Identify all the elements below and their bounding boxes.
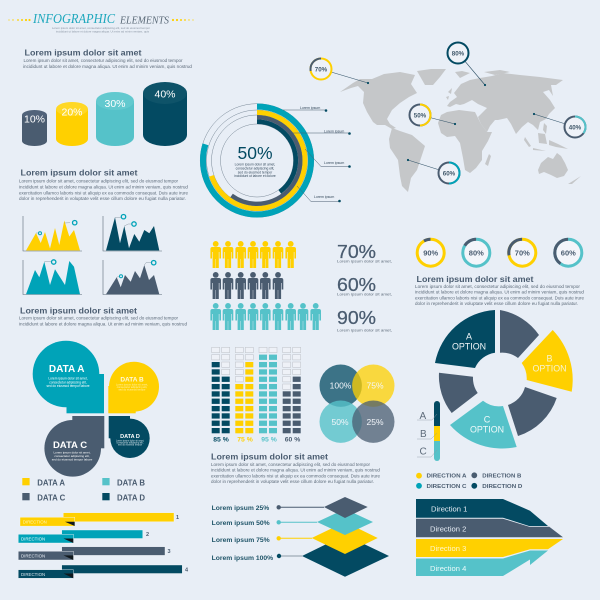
people percentages: Lorem ipsum dolor sit amet, [337,258,392,264]
map callouts [310,42,586,184]
petal: data b: consectetur adipiscing elit, [117,385,147,389]
text block: area charts heading: Lorem ipsum dolor sit amet, consectetur adipiscing elit, sed do eiusmod tempor [19,178,178,184]
arrow 3: Direction 3 [430,544,466,553]
bar chart labels [213,437,300,444]
bar 1: DIRECTION [23,520,47,524]
text block: donuts caption: incididunt ut labore et dolore magna aliqua. Ut enim ad minim veniam, quis nostrud [415,290,584,296]
callout 40%: 40% [569,124,582,131]
segment a: A [466,332,472,342]
callout 70%: 70% [315,66,328,73]
petal: data d: DATA D [120,434,140,440]
petal: data b: DATA B [120,376,144,384]
radial ring chart: Lorem ipsum [314,195,334,199]
text block: donuts caption: Lorem ipsum dolor sit amet [416,274,534,284]
title: ELEMENTS [119,16,169,26]
cylinder 20%: 20% [61,106,83,118]
data legend [22,478,145,502]
petal: data a: sed do eiusmod tempor labore [46,384,90,388]
title: incididunt ut labore et dolore magna aliqua. Ut enim ad minim veniam, quis [56,30,150,34]
donut 90% [417,239,444,266]
text block: layers heading: dolor in reprehenderit in voluptate velit esse cillum dolore eu fugiat nulla pariatur. [211,479,374,485]
area chart: teal [23,260,82,294]
venn diagram: 100% [330,381,352,391]
petal: data d: consectetur adipiscing elit, [117,442,144,444]
bar 4: DIRECTION [21,572,45,577]
petal: data c: DATA C [53,440,87,451]
text block: layers heading: exercitation ullamco laboris nisi ut aliquip ex ea commodo consequat. Duis aute irure [211,473,380,479]
text block: area charts caption: incididunt ut labore et dolore magna aliqua. Ut enim ad minim veniam, quis nostrud [19,322,187,328]
title: Lorem ipsum dolor sit amet, consectetur adipiscing elit, sed do eiusmod tempor [52,26,150,30]
world map [340,69,581,192]
segment a [435,310,495,368]
cylinder 40%: 40% [154,88,176,100]
segment right [508,387,557,436]
text block: layers heading: Lorem ipsum dolor sit amet, consectetur adipiscing elit, sed do eiusmod tempor [211,462,370,468]
radial ring chart: Lorem ipsum [324,161,344,165]
text block: cylinders heading: Lorem ipsum dolor sit amet [24,48,142,58]
area chart: navy [103,214,162,251]
column pair 95% [259,347,277,433]
text block: cylinders heading [23,48,192,70]
column pair 85% [212,347,230,433]
segmented donut chart [435,310,573,448]
radial ring chart: Lorem ipsum [300,106,320,110]
donut 60% [555,239,582,266]
ring centre value: incididunt ut labore et dolore [234,174,276,178]
ring centre value: 50% [237,143,273,163]
people percentages [337,242,392,332]
petal: data a: Lorem ipsum dolor sit amet, [48,376,88,380]
bar 3 [18,547,171,560]
text block: area charts heading: dolor in reprehenderit in voluptate velit esse cillum dolore eu fugiat nulla pariatur. [19,196,186,202]
petal: data b [108,362,159,413]
arrow 4 [416,550,548,576]
cylinder 30%: 30% [104,98,126,110]
petal: data a: DATA A [49,364,84,375]
people percentages: Lorem ipsum dolor sit amet, [337,292,392,296]
bar 1: 1 [176,515,179,521]
bar 3: 3 [168,549,171,555]
text block: donuts caption: exercitation ullamco laboris nisi ut aliquip ex ea commodo consequat. Duis aute irure [415,296,584,302]
progress donuts [417,239,582,266]
segment b: OPTION [532,364,566,374]
petal: data d: Lorem ipsum dolor sit amet, [116,439,145,442]
callout 80%: 80% [452,50,465,57]
cylinder chart [22,82,187,146]
arrow 4: Direction 4 [430,564,466,573]
text block: area charts caption: Lorem ipsum dolor sit amet, consectetur adipiscing elit, sed do eiusmod tempor [19,316,178,322]
people row 60% [210,272,283,299]
text block: area charts caption: Lorem ipsum dolor sit amet [20,306,137,316]
arrow 3 [416,539,563,557]
donut 60%: 60% [561,248,576,258]
data legend: DATA B [117,478,145,487]
people row 90% [210,303,321,330]
ring centre value: consectetur adipiscing elit, [236,166,274,170]
block bar chart [212,347,301,444]
abc scale: B [420,429,427,440]
people pictogram [210,241,321,330]
data legend: DATA C [37,494,66,502]
text block: area charts heading [19,168,188,202]
venn diagram: 25% [366,417,384,427]
cylinder 10%: 10% [24,114,45,126]
callout 60%: 60% [443,170,456,177]
abc scale: C [420,446,427,458]
butterfly diagram [33,341,159,477]
bar 4: 4 [185,568,189,574]
abc scale [417,401,440,461]
callout 50%: 50% [414,112,427,119]
donut 80% [463,239,490,266]
title: INFOGRAPHIC [32,12,116,27]
text block: area charts heading: Lorem ipsum dolor sit amet [20,168,138,178]
bar 1 [20,513,179,526]
text block: cylinders heading: incididunt ut labore et dolore magna aliqua. Ut enim ad minim veniam, quis nostrud [23,64,192,70]
ring leader lines [283,110,349,202]
data legend: DATA D [117,494,145,502]
venn diagram [320,364,394,443]
donut 70% [509,239,536,266]
direction legend: DIRECTION A [426,474,467,480]
segment b: B [546,354,553,364]
segment b [522,330,573,392]
layer labels: Lorem ipsum 100% [212,555,273,562]
petal: data c: sed do eiusmod tempor labore [52,457,93,461]
text block: layers heading [211,452,380,485]
people percentages: 60% [337,275,376,295]
text block: area charts caption [19,306,187,328]
data legend: DATA A [37,478,65,487]
direction legend: DIRECTION D [482,484,523,490]
radial ring chart [200,104,351,217]
text block: donuts caption [415,274,584,307]
direction legend: DIRECTION B [482,474,522,480]
people percentages: 90% [337,308,376,328]
bar chart labels: 60 % [285,437,300,444]
converging arrows [416,499,563,576]
segment c [450,401,517,448]
petal: data a: consectetur adipiscing elit, [49,380,87,384]
petal: data d: sed do eiusmod tempor [118,444,142,447]
bar 2 [18,530,149,543]
callout 70% [310,58,332,80]
area chart: yellow [23,216,82,251]
text block: area charts heading: exercitation ullamco laboris nisi ut aliquip ex ea commodo consequat. Duis aute irure [19,190,188,196]
arrow 2 [416,519,563,537]
cylinder 10% [22,110,47,146]
direction legend: DIRECTION C [426,484,467,490]
cylinder 40% [143,82,187,146]
column pair 60% [283,347,301,433]
radial ring chart: Lorem ipsum [324,130,344,134]
layer labels: Lorem ipsum 75% [212,537,270,544]
petal: data c: consectetur adipiscing elit, [54,454,90,458]
bar chart labels: 85 % [213,437,229,444]
petal: data d [109,416,150,458]
bar 3: DIRECTION [21,554,45,558]
bar chart labels: 95 % [261,437,277,444]
petal: data a [33,341,104,413]
donut 70%: 70% [515,248,530,258]
ring centre value [234,143,276,178]
people percentages: Lorem ipsum dolor sit amet, [337,328,392,332]
layer labels [212,505,273,562]
segment left [439,373,478,413]
arrow 1: Direction 1 [431,504,467,514]
text block: layers heading: Lorem ipsum dolor sit amet [211,452,328,462]
text block: cylinders heading: Lorem ipsum dolor sit amet, consectetur adipiscing elit, sed do eiusmod tempor [24,58,183,64]
area chart: slate [103,260,162,294]
callout 80% [448,42,468,64]
callout 50% [410,104,430,126]
petal: data b: Lorem ipsum dolor sit amet, [116,382,148,386]
text block: area charts heading: incididunt ut labore et dolore magna aliqua. Ut enim ad minim veniam, quis nostrud [19,184,188,190]
segment a: OPTION [452,341,486,351]
donut 90%: 90% [423,248,439,258]
ring centre value: Lorem ipsum dolor sit amet, [235,162,275,166]
petal: data b: sed do eiusmod tempor [118,388,146,392]
arrow 2: Direction 2 [430,524,466,534]
text block: donuts caption: dolor in reprehenderit in voluptate velit esse cillum dolore eu fugiat nulla pariatur. [415,301,578,307]
callout 40% [564,116,586,138]
direction legend [416,472,523,490]
venn diagram: 75% [366,381,384,391]
petal: data c [44,416,104,477]
stacked layers diagram [212,497,389,577]
segment top [500,310,539,358]
bar 4 [18,565,189,578]
bar 2: DIRECTION [21,536,45,542]
column pair 75% [235,347,253,433]
ring centre value: sed do eiusmod tempor [238,170,273,174]
abc scale: A [420,411,426,422]
title [8,12,194,34]
people row 70% [210,241,296,268]
layer labels: Lorem ipsum 25% [212,505,269,512]
text block: layers heading: incididunt ut labore et dolore magna aliqua. Ut enim ad minim veniam, quis nostrud [211,468,380,474]
layer leader lines [276,505,324,558]
text block: donuts caption: Lorem ipsum dolor sit amet, consectetur adipiscing elit, sed do eiusmod tempor [415,284,580,290]
people percentages: 70% [337,242,376,262]
direction bars [18,513,189,578]
cylinder 30% [96,92,134,146]
bar chart labels: 75 % [237,437,253,444]
segment c: OPTION [470,424,504,434]
layer labels: Lorem ipsum 50% [212,520,270,527]
donut 80%: 80% [469,248,484,258]
arrow 1 [416,499,548,526]
venn diagram: 50% [331,417,349,427]
segment c: C [484,414,491,424]
petal: data c: Lorem ipsum dolor sit amet, [53,450,91,454]
callout 60% [438,162,460,184]
bar 2: 2 [146,532,149,538]
cylinder 20% [56,102,88,146]
